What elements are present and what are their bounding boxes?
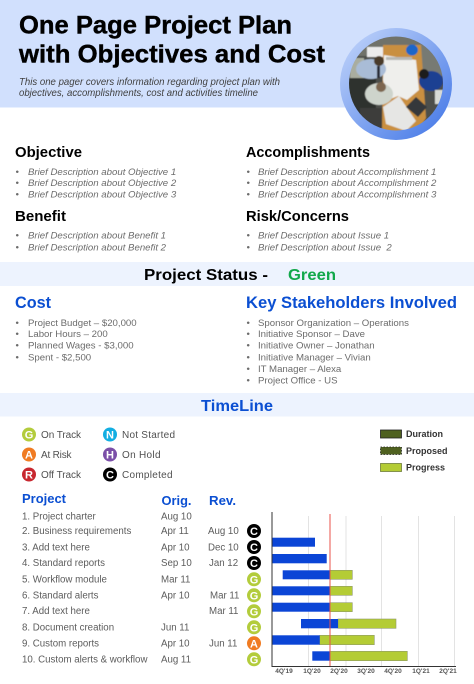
project table: Apr 10	[161, 638, 190, 650]
gantt chart: 1Q'20	[303, 668, 321, 675]
gantt chart: 4Q'19	[275, 668, 293, 675]
project table: Orig.	[162, 493, 192, 508]
project table: 4. Standard reports	[22, 558, 105, 569]
project table: Aug 10	[208, 526, 239, 537]
gantt chart: 2Q'21	[439, 668, 457, 675]
status legend: C	[106, 470, 114, 482]
photo: team meeting from above	[340, 28, 452, 140]
status legend: N	[106, 430, 114, 442]
project table	[22, 491, 239, 666]
project table: 7. Add text here	[22, 606, 90, 617]
project table: Aug 11	[161, 654, 191, 666]
panel: cost: Planned Wages - $3,000	[28, 341, 134, 352]
project table: 9. Custom reports	[22, 638, 99, 650]
project table: Jun 11	[209, 638, 237, 650]
status icons: G	[250, 622, 258, 634]
panel: key stakeholders: Project Office - US	[258, 376, 338, 387]
title	[18, 12, 326, 68]
panel: cost: Cost	[15, 294, 51, 312]
panel: key stakeholders: IT Manager – Alexa	[258, 364, 342, 375]
project table: 8. Document creation	[22, 622, 114, 634]
panel: objective: •	[16, 190, 20, 201]
status icons: C	[250, 526, 258, 538]
panel: benefit: Benefit	[15, 209, 66, 225]
status legend: On Hold	[122, 450, 160, 461]
panel: accomplishments: Accomplishments	[246, 145, 370, 161]
bar legend: Proposed	[406, 446, 448, 456]
panel: risk and concerns: Brief Description about Issue 1	[258, 230, 389, 242]
title: One Page Project Plan	[19, 12, 292, 40]
status legend: Completed	[122, 470, 172, 481]
panel: objective: •	[16, 178, 20, 189]
panel: benefit: Brief Description about Benefit 2	[28, 242, 167, 254]
subtitle: objectives, accomplishments, cost and activities timeline	[19, 87, 258, 99]
project table: 5. Workflow module	[22, 574, 107, 586]
status icons: G	[250, 606, 258, 618]
project table: Mar 11	[209, 606, 238, 617]
subtitle	[19, 76, 280, 99]
panel: objective: Brief Description about Objective 2	[28, 178, 177, 189]
status icons: G	[250, 654, 258, 666]
project table: Apr 11	[161, 526, 189, 537]
panel: cost: •	[16, 329, 19, 340]
project table: Jun 11	[161, 622, 189, 634]
project table: Mar 11	[210, 590, 239, 602]
panel: cost: Labor Hours – 200	[28, 329, 108, 340]
project table: 1. Project charter	[22, 512, 97, 522]
panel: risk and concerns: Brief Description about Issue 2	[258, 242, 392, 254]
panel: objective	[15, 145, 177, 201]
panel: risk and concerns: Risk/Concerns	[246, 209, 349, 225]
project table: Apr 10	[161, 590, 190, 602]
status legend: At Risk	[41, 450, 72, 461]
status legend: G	[25, 430, 33, 442]
panel: accomplishments: Brief Description about Accomplishment 2	[258, 178, 437, 189]
project table: Jan 12	[209, 558, 238, 569]
status icons: A	[250, 638, 258, 650]
panel: cost: •	[16, 318, 19, 329]
panel: key stakeholders: •	[246, 329, 250, 340]
gantt chart: 2Q'20	[330, 668, 348, 675]
panel: objective: Brief Description about Objective 1	[28, 167, 176, 178]
project table: 2. Business requirements	[22, 526, 131, 537]
title: with Objectives and Cost	[18, 40, 326, 68]
panel: accomplishments: •	[246, 167, 250, 178]
panel: key stakeholders: Initiative Sponsor – Dave	[258, 329, 365, 340]
project table: Project	[22, 491, 67, 506]
status icons: C	[250, 558, 258, 570]
panel: benefit	[15, 209, 167, 254]
timeline band	[0, 393, 474, 416]
panel: risk and concerns: •	[246, 230, 250, 242]
bar legend: Duration	[406, 429, 443, 439]
gantt chart: 3Q'20	[357, 668, 375, 675]
project table: 6. Standard alerts	[22, 590, 99, 602]
project table: Mar 11	[161, 574, 190, 586]
project table: Sep 10	[161, 558, 192, 569]
project table: 3. Add text here	[22, 542, 90, 554]
gantt chart: 1Q'21	[412, 668, 430, 675]
subtitle: This one pager covers information regarding project plan with	[19, 76, 280, 88]
status legend	[22, 428, 175, 482]
panel: key stakeholders: Initiative Owner – Jonathan	[258, 341, 375, 352]
panel: key stakeholders: •	[246, 318, 250, 329]
project table: Apr 10	[161, 542, 190, 554]
status legend: H	[106, 450, 114, 462]
panel: cost: •	[16, 341, 19, 352]
panel: cost	[15, 294, 137, 364]
status legend: R	[25, 470, 33, 482]
gantt chart	[272, 512, 457, 675]
project table: Rev.	[209, 493, 236, 508]
project status band: Green	[288, 267, 336, 284]
status icons: G	[250, 590, 258, 602]
panel: key stakeholders	[246, 294, 457, 387]
status icons: C	[250, 542, 258, 554]
status legend: Not Started	[122, 430, 175, 441]
panel: objective: •	[16, 167, 20, 178]
panel: benefit: •	[16, 230, 20, 242]
panel: accomplishments: •	[246, 190, 250, 201]
gantt chart: 4Q'20	[384, 668, 402, 675]
status legend: On Track	[41, 430, 82, 441]
panel: accomplishments: •	[246, 178, 250, 189]
panel: cost: Spent - $2,500	[28, 353, 91, 364]
project status band	[0, 262, 474, 286]
project table: 10. Custom alerts & workflow	[22, 654, 148, 666]
panel: cost: Project Budget – $20,000	[28, 318, 137, 329]
panel: objective: Objective	[15, 145, 82, 161]
project table: Dec 10	[208, 542, 239, 554]
status legend: Off Track	[41, 470, 82, 481]
project status band: Project Status -	[144, 267, 268, 284]
timeline band: TimeLine	[201, 398, 273, 415]
panel: accomplishments: Brief Description about Accomplishment 3	[258, 190, 437, 201]
panel: key stakeholders: Initiative Manager – Vivian	[258, 353, 371, 364]
panel: key stakeholders: Key Stakeholders Involved	[246, 294, 457, 312]
panel: key stakeholders: •	[246, 364, 250, 375]
status icons: G	[250, 574, 258, 586]
header band	[0, 0, 474, 108]
panel: key stakeholders: •	[246, 376, 250, 387]
panel: accomplishments	[246, 145, 437, 201]
panel: key stakeholders: •	[246, 353, 250, 364]
project table: Aug 10	[161, 512, 192, 522]
panel: objective: Brief Description about Objective 3	[28, 190, 177, 201]
status legend: A	[25, 450, 33, 462]
panel: accomplishments: Brief Description about Accomplishment 1	[258, 167, 436, 178]
panel: benefit: Brief Description about Benefit 1	[28, 230, 166, 242]
status icons	[247, 524, 261, 666]
panel: key stakeholders: •	[246, 341, 250, 352]
panel: benefit: •	[16, 242, 20, 254]
bar legend: Progress	[406, 462, 445, 472]
panel: key stakeholders: Sponsor Organization – Operations	[258, 318, 409, 329]
panel: cost: •	[16, 353, 19, 364]
panel: risk and concerns: •	[246, 242, 250, 254]
panel: risk and concerns	[246, 209, 392, 254]
bar legend	[380, 429, 448, 472]
